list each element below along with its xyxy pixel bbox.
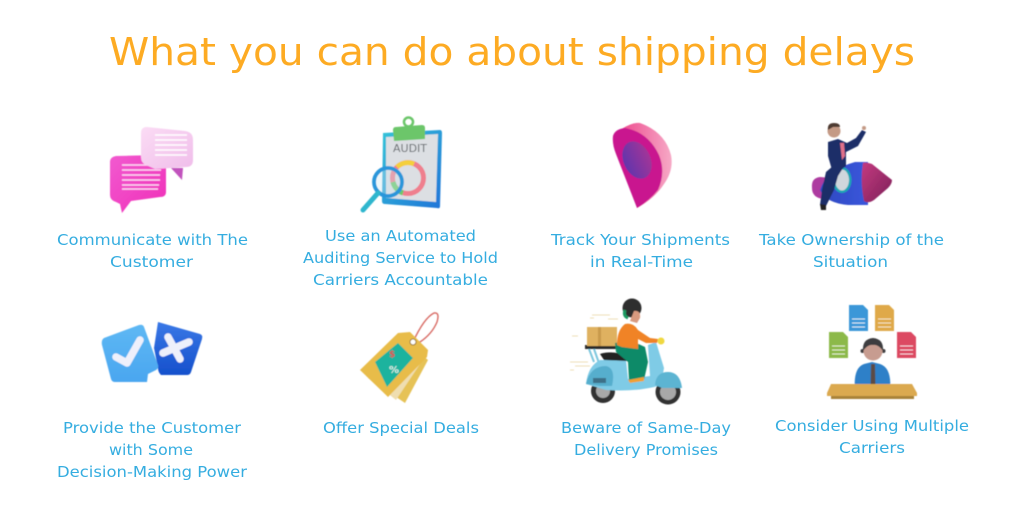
label: audit: Auditing Service to Hold [303, 249, 498, 267]
icon: price tags: % [389, 365, 399, 376]
icon: check and cross [102, 322, 202, 382]
icon: audit clipboard: AUDIT [393, 142, 427, 155]
label: communicate [57, 231, 248, 271]
document: red [897, 332, 916, 358]
label: same-day: Beware of Same-Day [561, 419, 731, 437]
label: multiple carriers: Carriers [839, 439, 905, 457]
icon: businessman on rocket [812, 123, 892, 210]
label: ownership [758, 231, 944, 271]
label: track: Track Your Shipments [550, 231, 730, 249]
label: decision power: Decision-Making Power [57, 463, 248, 481]
title: What you can do about shipping delays [109, 30, 915, 74]
label: ownership: Take Ownership of the [758, 231, 944, 249]
label: communicate: Communicate with The [57, 231, 248, 249]
document: yellow [875, 305, 894, 331]
label: communicate: Customer [110, 253, 194, 271]
icon: price tags [360, 313, 438, 403]
person at desk [827, 338, 917, 399]
document: green [829, 332, 848, 358]
icon: location pin [613, 123, 672, 208]
icon: price tags: $ [389, 350, 395, 360]
label: decision power: with Some [109, 441, 193, 459]
label: decision power: Provide the Customer [63, 419, 242, 437]
label: track: in Real-Time [590, 253, 693, 271]
icon: worker with documents [827, 305, 917, 399]
label: ownership: Situation [813, 253, 888, 271]
label: audit: Use an Automated [325, 227, 476, 245]
document: blue [849, 305, 868, 331]
label: track [550, 231, 730, 271]
label: same-day: Delivery Promises [574, 441, 718, 459]
label: multiple carriers [775, 417, 969, 457]
label: special deals: Offer Special Deals [323, 419, 479, 437]
label: decision power [57, 419, 248, 481]
icon: audit clipboard [363, 118, 442, 210]
label: multiple carriers: Consider Using Multiple [775, 417, 969, 435]
label: audit [303, 227, 498, 289]
label: same-day [561, 419, 731, 459]
label: audit: Carriers Accountable [313, 271, 488, 289]
icon: speech bubbles [110, 127, 193, 213]
icon: delivery scooter [570, 298, 682, 404]
